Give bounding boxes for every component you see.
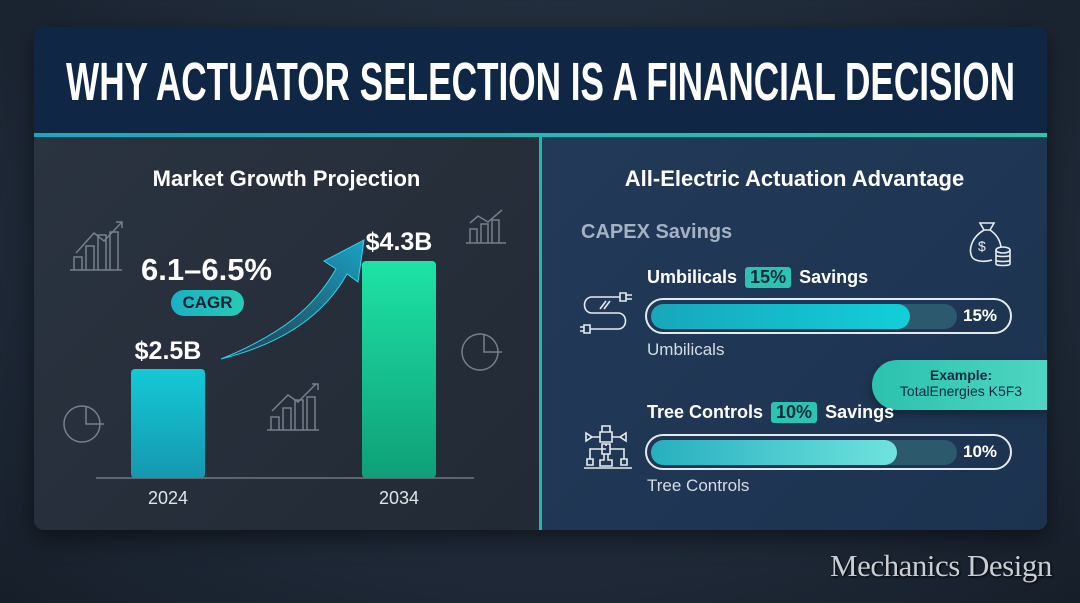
cagr pill: CAGR: [182, 293, 233, 312]
cagr pill: [171, 290, 244, 316]
panel: market growth: [34, 137, 539, 530]
row: tree controls: Tree Controls Savings: [647, 402, 894, 422]
card: [34, 27, 1047, 530]
row: umbilicals: Umbilicals: [647, 340, 724, 359]
row: umbilicals: 15%: [963, 306, 997, 325]
row: tree controls: Tree Controls: [647, 476, 749, 495]
row: tree controls: 10%: [776, 402, 812, 422]
icon: tree: [584, 425, 632, 469]
logo: Mechanics Design: [830, 548, 1052, 583]
panel: all-electric: [542, 137, 1047, 530]
icon: money bag: [970, 222, 1011, 266]
row: tree controls: [645, 402, 1012, 495]
bar 2024: [131, 369, 205, 478]
arrow: [221, 240, 364, 359]
label 4.3B: $4.3B: [366, 228, 432, 256]
row: tree controls: 10%: [963, 442, 997, 461]
cagr value: 6.1–6.5%: [141, 252, 272, 287]
icon: cable: [580, 292, 632, 334]
icon: money bag: $: [978, 238, 986, 254]
callout: example: [872, 360, 1050, 410]
bar 2034: [362, 261, 436, 478]
year 2034: 2034: [379, 488, 419, 508]
row: umbilicals: [645, 267, 1012, 359]
year 2024: 2024: [148, 488, 188, 508]
axis line: [96, 477, 474, 479]
title band: [34, 27, 1047, 134]
heading: market growth: Market Growth Projection: [153, 166, 420, 191]
callout: example: TotalEnergies K5F3: [900, 383, 1022, 399]
bar chart: [63, 210, 506, 479]
callout: example: Example:: [930, 367, 992, 383]
label 2.5B: $2.5B: [135, 337, 201, 365]
row: umbilicals: Umbilicals Savings: [647, 267, 868, 287]
subheading: capex: CAPEX Savings: [581, 221, 732, 243]
heading: all-electric: All-Electric Actuation Advantage: [625, 166, 964, 191]
row: umbilicals: 15%: [750, 267, 786, 287]
